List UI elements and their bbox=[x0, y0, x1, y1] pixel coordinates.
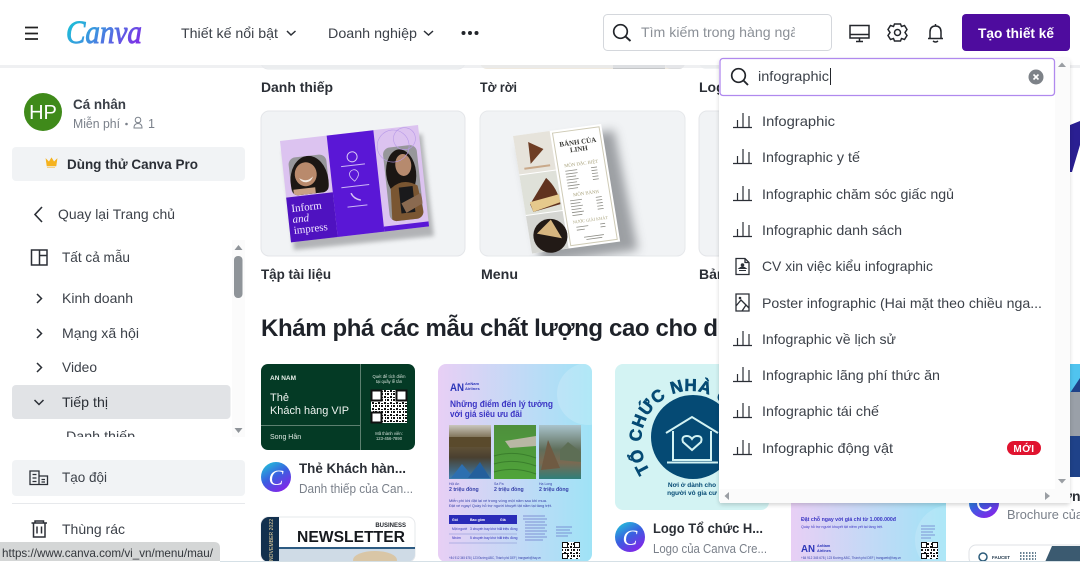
result: Infographic lãng phí thức ăn: Infographic lãng phí thức ăn bbox=[762, 367, 940, 383]
result: Infographic tái chế: Infographic tái chế bbox=[762, 403, 879, 419]
price table: 5 chuyến bay khứ hồi bbox=[470, 536, 502, 540]
global search box bbox=[604, 14, 832, 50]
template caption: Logo Tổ chức: Logo của Canva Cre... bbox=[653, 542, 767, 556]
template: AnNam Airlines poster: AnNam bbox=[465, 381, 479, 386]
card: Menu: LINH bbox=[569, 144, 589, 154]
template: Tổ chức Nhà logo: TỔ CHỨC NHÀ CHO bbox=[627, 377, 719, 477]
result: Infographic y tế: Infographic y tế bbox=[762, 149, 860, 165]
label: Bản: Bản bbox=[699, 266, 725, 282]
photo: Sa Pa bbox=[494, 425, 536, 479]
template caption: Brochure bbox=[969, 488, 1080, 522]
template: VIP member card bbox=[261, 364, 415, 450]
result: CV xin việc kiểu infographic: CV xin việc kiểu infographic bbox=[762, 258, 933, 274]
template: AnNam Airlines poster: Airlines bbox=[465, 386, 480, 391]
template: AnNam Airlines poster 2: Quầy hỗ trợ người khuyết tật niêm yết tại tầng trệt. bbox=[801, 524, 883, 529]
template: AnNam Airlines poster 2: +84 912 345 678 | 123 Đường ABC, Thành phố DEF | trangweb@hay.vn bbox=[801, 556, 901, 560]
result: Infographic bbox=[733, 113, 835, 129]
template: blue brochure (right edge) bbox=[1068, 364, 1080, 477]
template: Newsletter: BUSINESS bbox=[375, 523, 406, 529]
price table: 5 triệu đồng bbox=[500, 536, 518, 540]
template: Faucet flyer bbox=[969, 545, 1080, 562]
template: AnNam Airlines poster: 2 triệu đồng bbox=[449, 487, 479, 493]
button: Tạo đội bbox=[12, 460, 245, 496]
button: Dùng thử Canva Pro bbox=[12, 147, 245, 181]
photo: Hạ Long bbox=[539, 425, 581, 479]
menu item: Thùng rác bbox=[32, 521, 125, 537]
template caption: Brochure: Brochure của bbox=[1007, 508, 1080, 522]
plan info: Miễn phí bbox=[73, 116, 121, 131]
template: AnNam Airlines poster: Sa Pa bbox=[494, 482, 504, 486]
template: Faucet flyer: FAUCET bbox=[992, 555, 1010, 560]
template caption: Thẻ Khách hàng bbox=[261, 460, 413, 496]
price table bbox=[449, 515, 518, 543]
dropdown scrollbars bbox=[720, 58, 1070, 503]
icon: house with heart bbox=[666, 417, 718, 462]
card: Menu: MÓN ĐẶC BIỆT bbox=[564, 159, 599, 169]
template: VIP member card: tại quầy lễ tân bbox=[376, 379, 403, 384]
result: Infographic danh sách: Infographic danh sách bbox=[762, 222, 902, 238]
menu item: Tất cả mẫu bbox=[32, 249, 130, 265]
label: Tờ rời: Tờ rời bbox=[480, 79, 517, 95]
section heading: Khám phá các mẫu chất lượng cao cho d bbox=[261, 314, 718, 342]
label: Logo: Logo bbox=[699, 79, 733, 95]
template caption: Logo Tổ chức: C bbox=[623, 525, 638, 550]
template: AnNam Airlines poster: AN bbox=[450, 382, 464, 394]
sidebar scrollbar bbox=[232, 240, 245, 437]
icon: hamburger menu bbox=[25, 28, 38, 39]
template: Tổ chức Nhà logo: Nơi ở dành cho bbox=[668, 482, 716, 489]
price table: 3 triệu đồng bbox=[500, 527, 518, 531]
price table: 3 chuyến bay khứ hồi bbox=[470, 527, 502, 531]
button: Tạo thiết kế bbox=[962, 14, 1070, 51]
badge: MỚI: MỚI bbox=[1013, 442, 1035, 455]
menu item: Mạng xã hội: Mạng xã hội bbox=[62, 325, 139, 341]
menu item: Danh thiếp (clipped): Danh thiếp bbox=[66, 428, 135, 444]
card: Tập tài liệu brochure: Inform bbox=[291, 200, 323, 215]
user avatar bbox=[24, 93, 62, 131]
menu item: Thùng rác: Thùng rác bbox=[62, 521, 125, 537]
icon: more dots bbox=[462, 31, 478, 35]
card: Menu: BÁNH CỦA bbox=[559, 136, 597, 149]
template: VIP member card: 123-456-7890 bbox=[376, 436, 403, 441]
template: AnNam Airlines poster 2: AnNam bbox=[817, 544, 831, 548]
card: Menu: MÓN BÁNH bbox=[573, 189, 600, 198]
template: Tổ chức Nhà logo: người vô gia cư bbox=[667, 490, 717, 497]
result: Infographic: Infographic bbox=[762, 113, 835, 129]
top row template cards bbox=[261, 50, 739, 69]
button: Dùng thử Canva Pro: Dùng thử Canva Pro bbox=[67, 156, 198, 172]
template: AnNam Airlines poster: với giá siêu ưu đãi bbox=[450, 409, 522, 419]
template caption: Thẻ Khách hàng: C bbox=[269, 465, 284, 490]
template: AnNam Airlines poster: 2 triệu đồng bbox=[539, 487, 569, 493]
menu item: Tất cả mẫu: Tất cả mẫu bbox=[62, 249, 130, 265]
right edge decorative card bbox=[1070, 124, 1080, 172]
template: AnNam Airlines poster 2: Đặt chỗ ngay với giá chỉ từ 1.000.000đ bbox=[801, 516, 897, 523]
card: Tập tài liệu brochure bbox=[261, 111, 465, 256]
template: VIP member card: Thẻ bbox=[270, 392, 289, 404]
icon: desktop bbox=[850, 26, 869, 42]
template: VIP member card: Song Hân bbox=[270, 434, 301, 441]
template: VIP member card: AN NAM bbox=[270, 375, 296, 382]
menu item: Tiếp thị (selected): Tiếp thị bbox=[62, 394, 108, 410]
label: Tập tài liệu: Tập tài liệu bbox=[261, 266, 331, 282]
menu item: Video bbox=[37, 359, 97, 375]
plan info: 1 bbox=[148, 117, 155, 131]
template: AnNam Airlines poster: Những điểm đến lý tưởng bbox=[450, 399, 553, 409]
price table: Bao gồm bbox=[470, 518, 485, 522]
nav: Thiết kế nổi bật: Thiết kế nổi bật bbox=[181, 25, 278, 41]
template: AnNam Airlines poster: Hạ Long bbox=[539, 482, 552, 486]
card: Menu: NƯỚC GIẢI KHÁT bbox=[572, 215, 609, 225]
photo: Hội An bbox=[449, 425, 491, 479]
back link: Quay lại Trang chủ bbox=[58, 206, 175, 222]
result: Poster infographic: Poster infographic (Hai mặt theo chiều nga... bbox=[762, 295, 1042, 311]
template: Tổ chức Nhà logo bbox=[615, 364, 769, 510]
template: Newsletter: NEWSLETTER bbox=[297, 529, 405, 546]
template: VIP member card: Mã thành viên: bbox=[375, 431, 403, 436]
nav: Doanh nghiệp: Doanh nghiệp bbox=[328, 25, 417, 41]
search dropdown panel bbox=[719, 58, 1070, 505]
card: third template (partly hidden) bbox=[699, 111, 759, 256]
QR code bbox=[371, 390, 407, 423]
template: AnNam Airlines poster: +84 912 345 678 | 123 Đường ABC, Thành phố DEF | trangweb@hay.vn bbox=[449, 556, 541, 560]
template caption: Thẻ Khách hàng: Danh thiếp của Can... bbox=[299, 482, 413, 496]
dropdown search input: infographic bbox=[758, 68, 829, 84]
result: Infographic về lịch sử: Infographic về lịch sử bbox=[762, 331, 896, 347]
status URL tooltip: https://www.canva.com/vi_vn/menu/mau/ bbox=[2, 546, 214, 560]
Canva logo: Canva bbox=[66, 15, 142, 51]
icon: notification bell bbox=[928, 24, 943, 42]
template: AnNam Airlines poster 2: Airlines bbox=[817, 549, 831, 553]
global search box: Tìm kiếm trong hàng ngàn bbox=[641, 24, 806, 40]
label: Menu: Menu bbox=[481, 266, 518, 282]
card: Menu bbox=[480, 111, 685, 264]
price table: Nhóm bbox=[452, 536, 461, 540]
template: AnNam Airlines poster: 2 triệu đồng bbox=[494, 487, 524, 493]
template: Newsletter bbox=[261, 517, 415, 562]
menu item: Video: Video bbox=[62, 359, 97, 375]
menu item: Kinh doanh: Kinh doanh bbox=[62, 290, 133, 306]
user avatar: HP bbox=[29, 102, 57, 124]
template: VIP member card: Khách hàng VIP bbox=[270, 405, 349, 417]
label: Danh thiếp: Danh thiếp bbox=[261, 79, 333, 95]
template: AnNam Airlines poster: Đặt vé ngay! Quầy hỗ trợ người khuyết tật nằm tại tầng trệt. bbox=[449, 503, 552, 508]
template caption: Brochure: ơn bbox=[1062, 488, 1080, 504]
template: AnNam Airlines poster: Hội An bbox=[449, 482, 459, 486]
icon: settings gear bbox=[888, 24, 907, 41]
price table: Một người bbox=[452, 527, 467, 531]
badge: MỚI bbox=[1007, 441, 1041, 455]
template caption: Logo Tổ chức bbox=[615, 520, 767, 556]
template: VIP member card: Quét để tích điểm bbox=[372, 374, 406, 379]
button: Tạo thiết kế: Tạo thiết kế bbox=[978, 25, 1054, 41]
card: Tập tài liệu brochure: impress bbox=[293, 221, 328, 237]
price table: Gói bbox=[452, 518, 458, 522]
button: Tạo đội: Tạo đội bbox=[62, 469, 107, 485]
top navigation bar bbox=[0, 14, 1080, 68]
result: Infographic chăm sóc giấc ngủ: Infographic chăm sóc giấc ngủ bbox=[762, 186, 954, 202]
template: AnNam Airlines poster: Miễn phí khi đặt lại vé trong vòng một năm sau khi mua. bbox=[449, 498, 547, 503]
template caption: Thẻ Khách hàng: Thẻ Khách hàn... bbox=[299, 460, 406, 476]
template caption: Logo Tổ chức: Logo Tổ chức H... bbox=[653, 520, 763, 536]
menu item: Tiếp thị (selected) bbox=[12, 385, 230, 419]
left sidebar bbox=[0, 66, 246, 562]
template: Newsletter: NOVEMBER 2022 bbox=[269, 519, 275, 561]
QR code bbox=[562, 542, 580, 559]
template: AnNam Airlines poster 2: AN bbox=[801, 544, 815, 555]
right edge dark triangle bbox=[1070, 121, 1080, 172]
template: AnNam Airlines poster 2 bbox=[791, 503, 946, 561]
result: Infographic động vật: Infographic động vật bbox=[762, 440, 893, 456]
QR code bbox=[921, 542, 938, 559]
plan info bbox=[73, 116, 155, 131]
price table: Giá bbox=[500, 518, 506, 522]
user name: Cá nhân bbox=[73, 96, 126, 112]
card: Tập tài liệu brochure: and bbox=[292, 212, 310, 226]
dropdown search input bbox=[720, 58, 1054, 96]
template: AnNam Airlines poster bbox=[438, 364, 592, 561]
